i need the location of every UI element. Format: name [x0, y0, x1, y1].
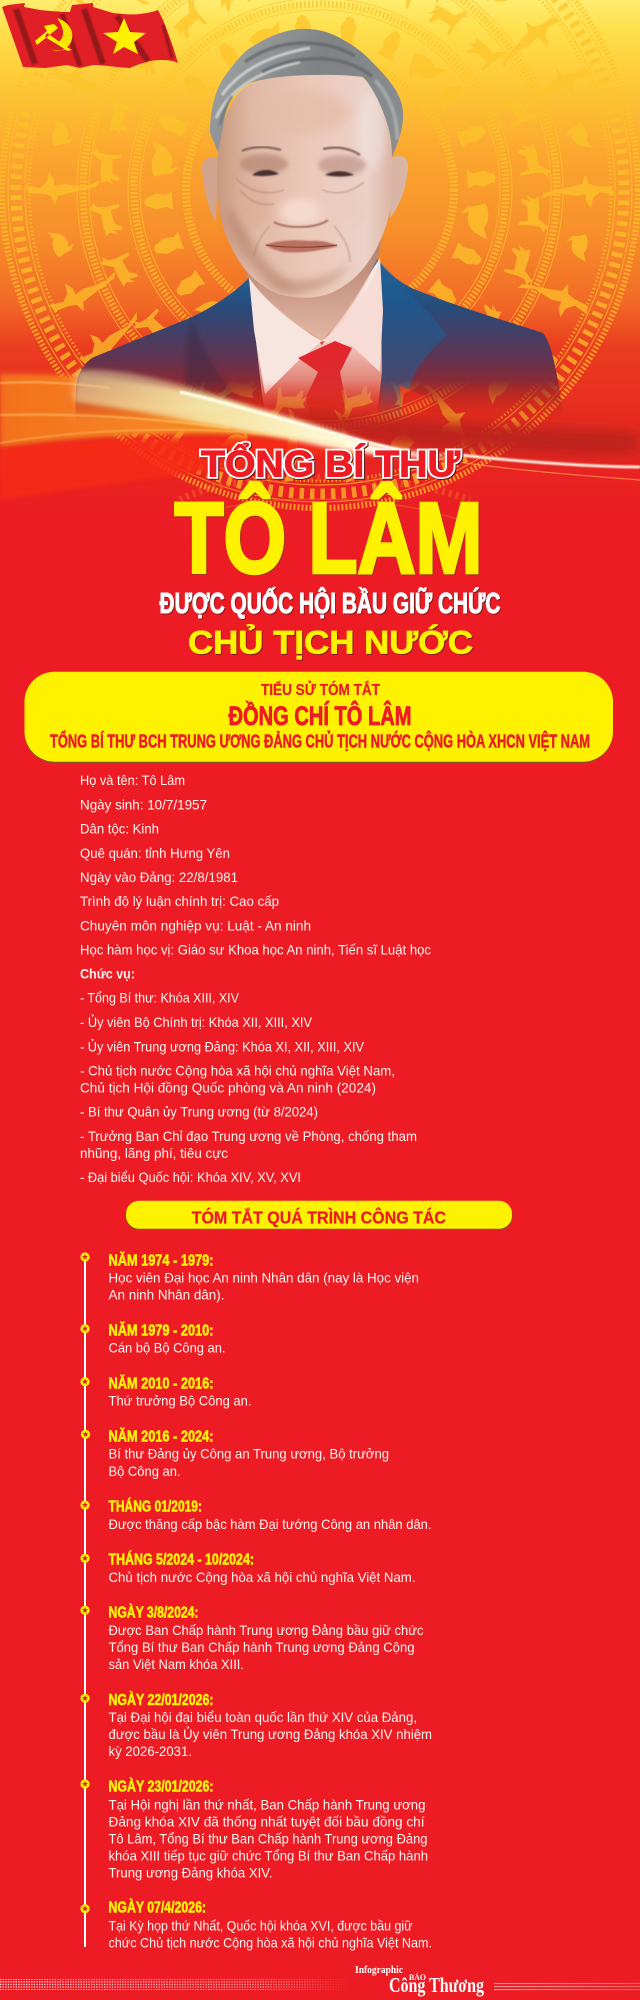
heading: Được Quốc Hội bầu giữ chức: ĐƯỢC QUỐC HỘI BẦU GIỮ CHỨC — [160, 587, 500, 620]
entry 3/8/2024: NGÀY 3/8/2024: — [108, 1603, 198, 1622]
entry 1974-1979 — [80, 1250, 419, 1302]
entry 01/2019: THÁNG 01/2019: — [108, 1497, 202, 1516]
entry 2016-2024: Bộ Công an. — [108, 1463, 180, 1479]
personal details: - Đại biểu Quốc hội: Khóa XIV, XV, XVI — [80, 1169, 301, 1185]
face — [217, 73, 393, 298]
personal details: - Ủy viên Trung ương Đảng: Khóa XI, XII, XIII, XIV — [80, 1037, 365, 1054]
yellow star — [103, 18, 146, 54]
mouth — [265, 240, 338, 253]
entry 2010-2016: NĂM 2010 - 2016: — [108, 1373, 214, 1392]
hero banner — [0, 0, 640, 560]
main title — [160, 442, 500, 660]
footer logo text: Infographic — [355, 1965, 403, 1976]
orange light band — [0, 374, 370, 448]
nose underside — [274, 220, 328, 227]
personal details: - Ủy viên Bộ Chính trị: Khóa XII, XIII, XIV — [80, 1013, 313, 1030]
nose highlight — [280, 198, 320, 226]
entry 23/01/2026: NGÀY 23/01/2026: — [108, 1777, 214, 1796]
mouth line — [266, 245, 337, 247]
entry 5/2024-10/2024: THÁNG 5/2024 - 10/2024: — [108, 1550, 254, 1569]
entry 2016-2024 — [81, 1426, 389, 1479]
entry 23/01/2026 — [80, 1777, 428, 1880]
personal details: Chủ tịch Hội đồng Quốc phòng và An ninh (2024) — [80, 1079, 376, 1095]
timeline axis — [84, 1257, 86, 1947]
entry 07/4/2026: Tại Kỳ họp thứ Nhất, Quốc hội khóa XVI, được bầu giữ — [108, 1917, 412, 1933]
pale light over suit — [74, 370, 250, 414]
entry 2010-2016: Thứ trưởng Bộ Công an. — [108, 1393, 252, 1409]
lapel pin — [400, 386, 432, 416]
entry 3/8/2024: Được Ban Chấp hành Trung ương Đảng bầu giữ chức — [108, 1622, 424, 1638]
personal details: Ngày vào Đảng: 22/8/1981 — [80, 869, 238, 885]
heading: Tổng Bí Thư: TỔNG BÍ THƯ — [201, 442, 460, 485]
personal details: Chuyên môn nghiệp vụ: Luật - An ninh — [80, 917, 311, 933]
footer logo text: BÁO — [409, 1972, 426, 1982]
Communist Party and Vietnam flag — [2, 3, 178, 68]
left eyebrow — [242, 147, 281, 151]
hero gradient background — [0, 0, 640, 560]
personal details: Chức vụ: — [80, 965, 135, 981]
face wrinkles — [236, 178, 364, 262]
left eye — [252, 170, 279, 176]
entry 22/01/2026 — [80, 1690, 432, 1759]
personal details: - Chủ tịch nước Cộng hòa xã hội chủ nghĩa Việt Nam, — [80, 1062, 395, 1078]
heading: Tổng Bí Thư: TỔNG BÍ THƯ — [201, 442, 460, 485]
entry 1979-2010: Cán bộ Bộ Công an. — [108, 1340, 226, 1356]
section pill: work history — [126, 1201, 512, 1230]
shirt front — [249, 258, 382, 425]
entry 1974-1979: An ninh Nhân dân). — [108, 1286, 224, 1302]
left dotted strip — [0, 1979, 350, 1990]
suit left lapel shade — [184, 322, 244, 404]
hair — [210, 29, 403, 157]
left collar — [249, 278, 322, 394]
entry 23/01/2026: Đảng khóa XIV đã thống nhất tuyệt đối bầu đồng chí — [108, 1813, 425, 1829]
left ear — [202, 157, 218, 222]
entry 1979-2010 — [80, 1320, 226, 1356]
right ear — [390, 156, 408, 218]
entry 3/8/2024 — [80, 1603, 424, 1672]
suit jacket — [76, 258, 565, 425]
entry 07/4/2026: chức Chủ tịch nước Cộng hòa xã hội chủ nghĩa Việt Nam. — [108, 1934, 432, 1950]
personal details — [80, 772, 431, 1185]
flag folds — [16, 9, 172, 66]
career timeline — [80, 1250, 432, 1950]
portrait of Tô Lâm — [76, 29, 565, 425]
hair strands — [216, 43, 397, 140]
banner line 1: TIỂU SỬ TÓM TẮT — [261, 681, 380, 699]
banner line 2: ĐỒNG CHÍ TÔ LÂM — [228, 701, 412, 731]
entry 1974-1979: NĂM 1974 - 1979: — [108, 1250, 214, 1269]
yellow biography banner — [24, 672, 613, 763]
right eye — [325, 171, 354, 176]
entry 23/01/2026: Tô Lâm, Tổng Bí thư Ban Chấp hành Trung ương Đảng — [108, 1830, 428, 1846]
personal details: Ngày sinh: 10/7/1957 — [80, 796, 207, 812]
entry 2016-2024: Bí thư Đảng ủy Công an Trung ương, Bộ trưởng — [108, 1446, 389, 1462]
entry 2016-2024: NĂM 2016 - 2024: — [108, 1426, 214, 1445]
heading: Chủ tịch nước: CHỦ TỊCH NƯỚC — [188, 623, 473, 660]
entry 07/4/2026: NGÀY 07/4/2026: — [108, 1898, 206, 1917]
personal details: - Bí thư Quân ủy Trung ương (từ 8/2024) — [80, 1104, 318, 1120]
entry 2010-2016 — [80, 1373, 252, 1409]
footer — [0, 1965, 640, 1997]
entry 23/01/2026: Trung ương Đảng khóa XIV. — [108, 1864, 272, 1880]
faint drum arcs behind title — [180, 478, 470, 520]
personal details: Học hàm học vị: Giáo sư Khoa học An ninh, Tiến sĩ Luật học — [80, 941, 431, 957]
personal details: Họ và tên: Tô Lâm — [80, 772, 185, 788]
entry 22/01/2026: NGÀY 22/01/2026: — [108, 1690, 214, 1709]
entry 3/8/2024: Tổng Bí thư Ban Chấp hành Trung ương Đảng Cộng — [108, 1639, 414, 1655]
entry 23/01/2026: Tại Hội nghị lần thứ nhất, Ban Chấp hành Trung ương — [108, 1796, 426, 1812]
suit right lapel — [376, 258, 447, 425]
entry 22/01/2026: kỳ 2026-2031. — [108, 1743, 192, 1759]
entry 1979-2010: NĂM 1979 - 2010: — [108, 1320, 214, 1339]
entry 5/2024-10/2024: Chủ tịch nước Cộng hòa xã hội chủ nghĩa Việt Nam. — [108, 1569, 416, 1585]
entry 07/4/2026 — [80, 1898, 432, 1950]
personal details: nhũng, lãng phí, tiêu cực — [80, 1145, 228, 1161]
entry 22/01/2026: Tại Đại hội đại biểu toàn quốc lần thứ XIV của Đảng, — [108, 1709, 417, 1725]
personal details: Dân tộc: Kinh — [80, 821, 159, 837]
personal details: Quê quán: tỉnh Hưng Yên — [80, 845, 230, 861]
lower dark glow — [250, 405, 640, 455]
entry 22/01/2026: được bầu là Ủy viên Trung ương Đảng khóa XIV nhiệm — [108, 1725, 432, 1742]
personal details: Trình độ lý luận chính trị: Cao cấp — [80, 893, 279, 909]
entry 3/8/2024: sản Việt Nam khóa XIII. — [108, 1656, 244, 1672]
entry 1974-1979: Học viên Đại học An ninh Nhân dân (nay là Học viện — [108, 1269, 419, 1285]
right eyebrow — [323, 148, 360, 155]
golden light streak — [0, 374, 640, 480]
flag cloth — [2, 3, 178, 68]
entry 01/2019 — [80, 1497, 432, 1532]
entry 01/2019: Được thăng cấp bậc hàm Đại tướng Công an nhân dân. — [108, 1516, 432, 1532]
red light band — [0, 438, 370, 500]
hammer and sickle — [35, 18, 72, 51]
entry 23/01/2026: khóa XIII tiếp tục giữ chức Tổng Bí thư Ban Chấp hành — [108, 1847, 428, 1863]
heading: Tô Lâm: TÔ LÂM — [174, 482, 482, 594]
right collar — [322, 258, 383, 372]
section pill: work history: TÓM TẮT QUÁ TRÌNH CÔNG TÁC — [192, 1206, 446, 1227]
face soft shading — [226, 90, 386, 293]
personal details: - Tổng Bí thư: Khóa XIII, XIV — [80, 990, 240, 1006]
red tie — [298, 341, 352, 409]
footer logo text: Công Thương — [389, 1973, 484, 1997]
entry 5/2024-10/2024 — [80, 1550, 416, 1585]
neck — [244, 234, 384, 342]
personal details: - Trưởng Ban Chỉ đạo Trung ương về Phòng, chống tham — [80, 1128, 417, 1144]
footer logo text — [355, 1965, 484, 1997]
right line strip — [494, 1983, 640, 1990]
bronze drum pattern — [0, 0, 640, 552]
